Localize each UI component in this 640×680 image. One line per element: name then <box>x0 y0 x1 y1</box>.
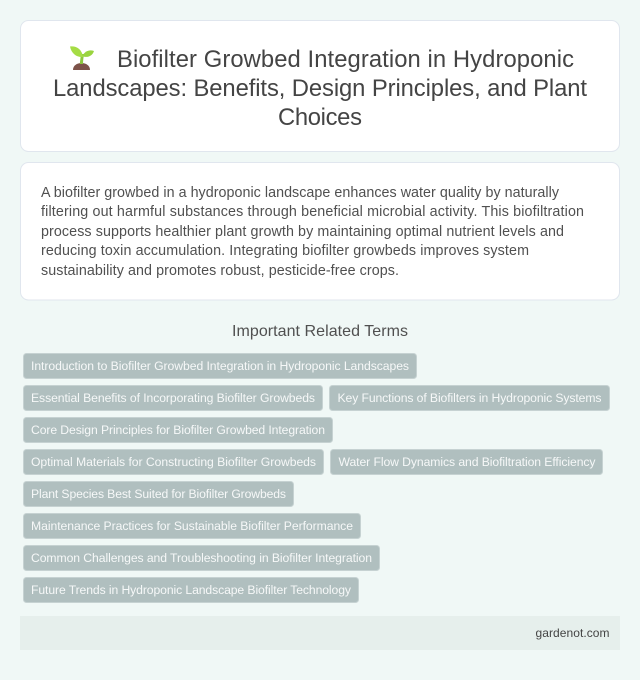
text block: description: process supports healthier plant growth by maintaining optimal nutrient levels and <box>41 224 564 240</box>
chip: future trends <box>24 578 358 602</box>
chip: optimal materials <box>24 450 324 474</box>
heading: important related terms: Important Related Terms <box>232 323 408 340</box>
chip: essential benefits: Essential Benefits of Incorporating Biofilter Growbeds <box>31 391 315 405</box>
text block: description: A biofilter growbed in a hydroponic landscape enhances water quality by naturally <box>41 185 560 201</box>
chip: water flow dynamics <box>330 450 602 474</box>
chip: introduction <box>24 354 416 378</box>
chip: core design principles: Core Design Principles for Biofilter Growbed Integration <box>31 423 325 437</box>
panel: related term chips <box>24 354 610 602</box>
chip: optimal materials: Optimal Materials for Constructing Biofilter Growbeds <box>31 455 316 469</box>
chip: common challenges: Common Challenges and Troubleshooting in Biofilter Integration <box>31 551 372 565</box>
chip: plant species <box>24 482 294 506</box>
icon: seedling <box>70 46 94 70</box>
chip: essential benefits <box>24 386 322 410</box>
chip: introduction: Introduction to Biofilter Growbed Integration in Hydroponic Landscapes <box>31 359 409 373</box>
chip: water flow dynamics: Water Flow Dynamics and Biofiltration Efficiency <box>338 455 596 469</box>
text block: description <box>41 185 584 279</box>
footer: site name: gardenot.com <box>536 626 610 640</box>
chip: plant species: Plant Species Best Suited for Biofilter Growbeds <box>31 487 286 501</box>
chip: maintenance practices: Maintenance Practices for Sustainable Biofilter Performance <box>31 519 353 533</box>
panel: title card <box>20 20 620 152</box>
title: Choices <box>278 104 362 131</box>
chip: future trends: Future Trends in Hydroponic Landscape Biofilter Technology <box>31 583 352 597</box>
text block: description: reducing toxin accumulation. Integrating biofilter growbeds improves system <box>41 243 529 259</box>
chip: core design principles <box>24 418 332 442</box>
title: Biofilter Growbed Integration in Hydroponic <box>117 46 574 73</box>
title <box>53 46 587 131</box>
chip: common challenges <box>24 546 380 570</box>
footer <box>20 616 620 650</box>
chip: key functions: Key Functions of Biofilters in Hydroponic Systems <box>338 391 602 405</box>
text block: description: filtering out harmful substances through beneficial microbial activity. This biofiltration <box>41 204 584 220</box>
text block: description: sustainability and promotes robust, pesticide-free crops. <box>41 263 399 279</box>
chip: maintenance practices <box>24 514 360 538</box>
panel: description card <box>20 162 620 300</box>
title: Landscapes: Benefits, Design Principles, and Plant <box>53 75 587 102</box>
chip: key functions <box>330 386 610 410</box>
